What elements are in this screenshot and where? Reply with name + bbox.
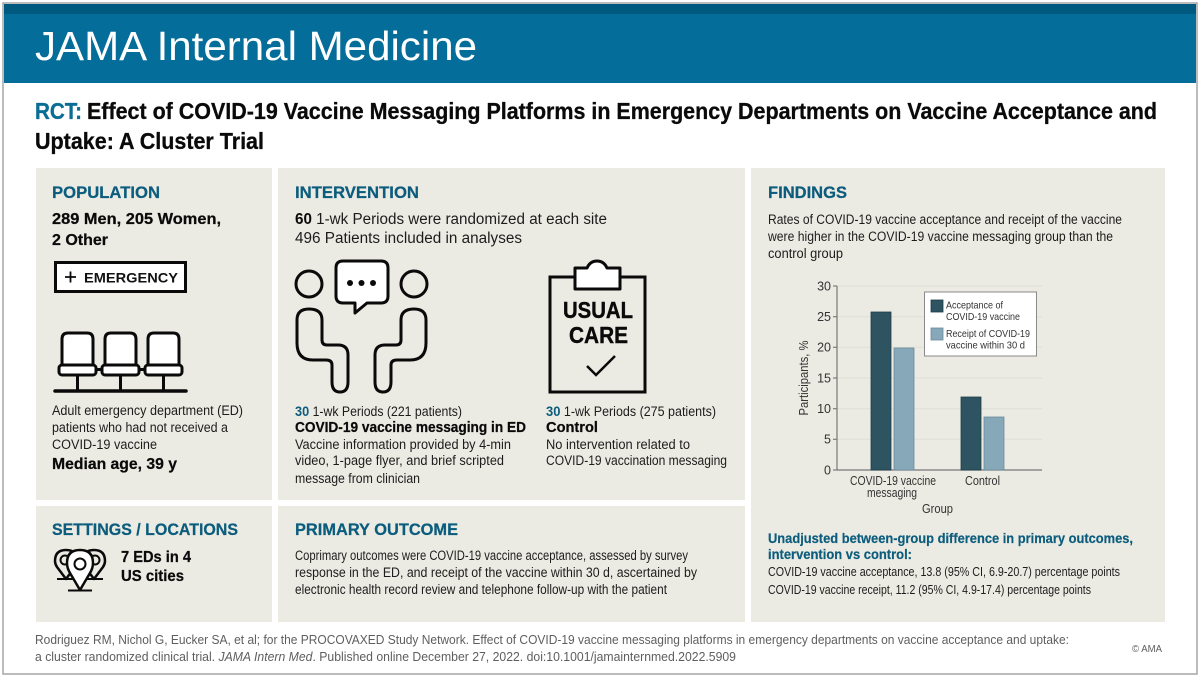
population counts: 289 Men, 205 Women,	[52, 211, 221, 228]
between-group results	[768, 565, 1120, 597]
panel: population	[36, 168, 272, 500]
icon: usual care clipboard: CARE	[569, 322, 628, 348]
x axis labels: messaging	[867, 486, 917, 500]
intervention arm text: COVID-19 vaccine messaging in ED	[295, 420, 526, 436]
control arm text	[546, 403, 727, 468]
population description: patients who had not received a	[52, 420, 228, 435]
settings text: US cities	[121, 568, 184, 585]
icon: usual care clipboard: USUAL	[563, 297, 633, 323]
intervention summary	[295, 211, 607, 247]
title	[35, 98, 1157, 154]
header banner: JAMA Internal Medicine	[35, 23, 477, 69]
intervention arm text	[295, 403, 526, 486]
between-group results: COVID-19 vaccine receipt, 11.2 (95% CI, 4.9-17.4) percentage points	[768, 583, 1091, 597]
y axis tick labels	[817, 280, 831, 478]
intervention arm text: video, 1-page flyer, and brief scripted	[295, 453, 504, 468]
header banner	[4, 4, 1196, 83]
legend: Acceptance of	[946, 300, 1003, 312]
intervention arm text: Vaccine information provided by 4-min	[295, 437, 511, 452]
intervention arm text: 30 1-wk Periods (221 patients)	[295, 403, 462, 419]
icon: clinician and patient conversation	[296, 261, 427, 392]
panel: intervention	[278, 168, 745, 500]
intervention arm text: message from clinician	[295, 471, 420, 486]
primary outcome text: Coprimary outcomes were COVID-19 vaccine acceptance, assessed by survey	[295, 548, 688, 563]
x axis labels: Control	[965, 474, 1000, 488]
between-group results: COVID-19 vaccine acceptance, 13.8 (95% CI, 6.9-20.7) percentage points	[768, 565, 1120, 579]
y axis tick labels: 10	[817, 402, 831, 416]
heading: intervention: INTERVENTION	[295, 183, 419, 202]
population description: COVID-19 vaccine	[52, 437, 157, 452]
settings text	[121, 549, 191, 585]
findings summary: were higher in the COVID-19 vaccine messaging group than the	[767, 229, 1113, 244]
title: Effect of COVID-19 Vaccine Messaging Platforms in Emergency Departments on Vaccine Acceptance and	[87, 98, 1157, 124]
control arm text: Control	[546, 420, 598, 436]
primary outcome text: response in the ED, and receipt of the vaccine within 30 d, ascertained by	[295, 565, 697, 580]
y axis tick labels: 0	[824, 464, 831, 478]
heading: findings: FINDINGS	[768, 183, 847, 202]
settings text: 7 EDs in 4	[121, 549, 191, 566]
intervention summary: 496 Patients included in analyses	[295, 230, 522, 247]
intervention summary: 60 1-wk Periods were randomized at each site	[295, 211, 607, 228]
x axis labels	[850, 474, 1000, 516]
icon: map pins	[55, 550, 105, 590]
legend: vaccine within 30 d	[946, 340, 1025, 352]
citation: Rodriguez RM, Nichol G, Eucker SA, et al; for the PROCOVAXED Study Network. Effect of COVID-19 vaccine messaging platforms in emergency departments on vaccine acceptance and uptake:	[35, 633, 1069, 647]
heading: primary outcome: PRIMARY OUTCOME	[295, 520, 458, 539]
x axis labels: Group	[922, 502, 953, 516]
heading: settings: SETTINGS / LOCATIONS	[52, 520, 238, 539]
citation	[35, 633, 1069, 664]
y axis tick labels: 15	[817, 372, 831, 386]
icon: usual care clipboard	[550, 261, 645, 392]
bar chart	[797, 280, 1042, 516]
primary outcome text: electronic health record review and telephone follow-up with the patient	[295, 582, 667, 597]
control arm text: 30 1-wk Periods (275 patients)	[546, 403, 716, 419]
icon: emergency sign	[56, 262, 186, 292]
y axis tick labels: 5	[824, 432, 831, 446]
y axis tick labels: 30	[817, 280, 831, 294]
bars: acceptance	[871, 312, 981, 470]
population counts: 2 Other	[52, 232, 108, 249]
copyright: © AMA	[1132, 644, 1162, 655]
population counts	[52, 211, 221, 249]
bars: receipt	[894, 348, 1004, 470]
icon: emergency sign: EMERGENCY	[84, 270, 179, 286]
population description: Adult emergency department (ED)	[52, 403, 243, 418]
population description	[52, 403, 243, 452]
citation: a cluster randomized clinical trial. JAMA Intern Med. Published online December 27, 2022. doi:10.1001/jamainternmed.2022.5909	[35, 650, 736, 664]
control arm text: No intervention related to	[546, 437, 690, 452]
findings summary	[767, 212, 1122, 261]
heading: population: POPULATION	[52, 183, 160, 202]
between-group difference heading: Unadjusted between-group difference in primary outcomes,	[768, 531, 1133, 546]
y axis title: Participants, %	[797, 340, 811, 416]
between-group difference heading: intervention vs control:	[768, 547, 912, 562]
findings summary: Rates of COVID-19 vaccine acceptance and receipt of the vaccine	[768, 212, 1122, 227]
legend: Receipt of COVID-19	[946, 328, 1030, 340]
panel: findings	[751, 168, 1165, 622]
primary outcome text	[295, 548, 697, 597]
legend	[924, 292, 1036, 356]
y axis tick labels: 25	[817, 310, 831, 324]
between-group difference heading	[768, 531, 1133, 562]
x axis labels: COVID-19 vaccine	[850, 474, 936, 488]
title: Uptake: A Cluster Trial	[35, 128, 264, 154]
icon: waiting room chairs	[55, 333, 186, 391]
control arm text: COVID-19 vaccination messaging	[546, 453, 727, 468]
title: RCT:	[35, 98, 82, 124]
legend: COVID-19 vaccine	[946, 311, 1020, 323]
y axis tick labels: 20	[817, 340, 831, 354]
panel: primary outcome	[278, 506, 745, 622]
panel: settings and locations	[36, 506, 272, 622]
findings summary: control group	[768, 246, 843, 261]
median age: Median age, 39 y	[52, 456, 177, 473]
